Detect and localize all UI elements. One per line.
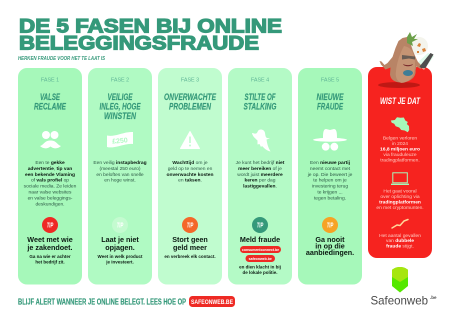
text block [379, 233, 421, 250]
text block: tradingplatformen [379, 200, 421, 206]
text block: via frauduleuze [383, 152, 417, 158]
logo: safeonweb [370, 267, 437, 308]
text block: een bekende Vlaming [25, 172, 75, 178]
text block: te helpen om je [313, 178, 347, 184]
text block: of vals profiel op [31, 178, 69, 184]
tip text: Stort geen [172, 235, 208, 244]
heading: veilige inleg: INLEG, HOGE [100, 102, 141, 112]
tip text: de lokale politie. [242, 270, 278, 275]
logo: safeonweb: Safeonweb [370, 294, 428, 308]
icon: tip badge [182, 217, 198, 233]
panel: fase 1: FASE 1 [41, 78, 59, 84]
text block: tegen betaling. [314, 196, 346, 202]
heading: veilige inleg: WINSTEN [104, 111, 136, 121]
text block: wordt juist meerdere [237, 172, 283, 178]
heading: valse reclame: RECLAME [34, 102, 67, 112]
tip text [164, 235, 216, 259]
heading: valse reclame: VALSE [40, 92, 61, 102]
text block: en beloftes van snelle [96, 172, 144, 178]
icon: tip badge: TIP [257, 222, 263, 230]
text block: geld op te nemen en [168, 166, 213, 172]
link pill [189, 296, 235, 307]
text block [93, 160, 147, 184]
tip text: consumentconnect.be [242, 248, 279, 252]
heading: nieuwe fraude: NIEUWE [316, 92, 344, 102]
text block: over oplichting via [380, 194, 420, 200]
text block: te krijgen ... [317, 190, 343, 196]
text block: investering terug [312, 184, 348, 190]
icon: laptop [391, 173, 409, 184]
text block: Je kunt het bedrijf niet [236, 160, 285, 166]
heading: onverwachte problemen: ONVERWACHTE [164, 92, 217, 102]
heading: nieuwe fraude [316, 92, 344, 112]
text block: Een nieuwe partij [310, 160, 351, 166]
panel: fase 3: FASE 3 [181, 78, 199, 84]
icon: rising line [392, 220, 408, 228]
icon: tip badge: TIP [327, 222, 333, 230]
panel: fase 2 [88, 68, 152, 284]
text block [166, 160, 214, 184]
text block [24, 160, 77, 208]
icon: hat and glasses [313, 129, 347, 151]
text block [307, 160, 353, 202]
text block: in 2024 [392, 141, 408, 147]
title: DE 5 FASEN BIJ ONLINE [19, 16, 282, 38]
icon: mustache and glasses [40, 131, 61, 148]
icon: map of Belgium [391, 117, 409, 132]
tip text: geld meer [173, 243, 207, 252]
text block: (meestal 250 euro) [99, 166, 141, 172]
text block: lastiggevallen. [243, 184, 277, 190]
heading: nieuwe fraude: FRAUDE [317, 102, 344, 112]
heading: veilige inleg: VEILIGE [108, 92, 133, 102]
tip text [239, 235, 281, 275]
text block: van dubbele [386, 238, 414, 244]
icon: tip badge: TIP [117, 222, 123, 230]
text block: Een te gekke [35, 160, 65, 166]
tip text: Ga na wie er achter [29, 254, 71, 259]
text block: Een veilig instapbedrag [93, 160, 147, 166]
text block: en met cryptomunten. [376, 205, 424, 211]
icon: shield [392, 267, 408, 292]
text block: naar valse websites [29, 190, 72, 196]
icon: tip badge: TIP [187, 222, 193, 230]
tip text: Ga nooit [315, 235, 345, 244]
heading: onverwachte problemen [164, 92, 217, 112]
icon: tip badge [322, 217, 338, 233]
text block: 16,8 miljoen euro [380, 146, 420, 152]
text block [380, 136, 420, 164]
text block: advertentie, tip van [28, 166, 72, 172]
subtitle: HERKEN FRAUDE VOOR HET TE LAAT IS [18, 56, 105, 62]
icon: warning triangle [180, 132, 200, 148]
text block: en valse beleggings- [28, 196, 73, 202]
tip text: en verbreek elk contact. [164, 254, 216, 259]
text block: Wachttijd om je [172, 160, 208, 166]
text block: keren per dag [244, 178, 276, 184]
tip text [306, 235, 354, 257]
panel: fase 1 [18, 68, 82, 284]
panel: fase 5 [298, 68, 362, 284]
tip text: opjagen. [105, 243, 135, 252]
tip text: het bedrijf zit. [35, 260, 65, 264]
tip text: Weet in welk product [98, 254, 143, 259]
title: BELEGGINGSFRAUDE [19, 34, 259, 54]
logo: safeonweb: .be [430, 295, 437, 300]
icon: ghost [252, 129, 270, 152]
tip text: je zakendoet. [26, 243, 73, 252]
heading: stilte of stalking: STILTE OF [244, 92, 276, 102]
text block: Het aantal gevallen [379, 233, 421, 239]
tip text: aanbiedingen. [306, 248, 354, 257]
text block: en hoge winst. [104, 178, 136, 184]
panel: fase 4: FASE 4 [251, 78, 269, 84]
icon: tip badge [252, 217, 268, 233]
text block: Het gaat vooral [383, 188, 417, 194]
text block: deskundigen. [35, 202, 65, 208]
text block: neemt contact met [310, 166, 351, 172]
tip text [26, 235, 73, 264]
tip text: in op die [315, 242, 345, 250]
text block: meer bereiken of je [238, 166, 282, 172]
heading: stilte of stalking [244, 92, 276, 112]
title [19, 16, 282, 54]
icon: banknote flag [107, 132, 133, 147]
heading: veilige inleg [100, 92, 141, 121]
panel: fase 3 [158, 68, 222, 284]
text block: Belgen verloren [383, 136, 417, 142]
tip text [98, 235, 143, 264]
tip text: je investeert. [105, 260, 134, 264]
text block [236, 160, 285, 190]
link pill: SAFEONWEB.BE [191, 299, 234, 306]
tip text: en dien klacht in bij [239, 264, 281, 270]
panel: fase 5: FASE 5 [321, 78, 339, 84]
tip text: safeonweb.be [249, 257, 272, 261]
panel: fase 4 [228, 68, 292, 284]
panel: fase 2: FASE 2 [111, 78, 129, 84]
icon: mascot character [380, 32, 434, 83]
heading: onverwachte problemen: PROBLEMEN [169, 102, 211, 112]
text block: sociale media. Ze leiden [24, 184, 77, 190]
heading: WIST JE DAT [380, 96, 421, 106]
text block: en taksen. [178, 178, 202, 184]
tip text: Laat je niet [101, 235, 139, 244]
heading: stilte of stalking: STALKING [244, 102, 276, 112]
icon: tip badge: TIP [47, 222, 53, 230]
panel: wist je dat [368, 67, 432, 258]
icon: tip badge [42, 217, 58, 233]
text block [376, 188, 424, 211]
footer call to action: BLIJF ALERT WANNEER JE ONLINE BELEGT. LEES HOE OP [18, 298, 186, 306]
text block: onverwachte kosten [166, 172, 214, 178]
text block: tradingplatformen. [380, 158, 420, 164]
tip text: Weet met wie [27, 235, 73, 244]
icon: banknote flag: £250 [112, 137, 128, 146]
heading: valse reclame [34, 92, 67, 112]
icon: tip badge [112, 217, 128, 233]
text block: je op. Die beweert je [307, 172, 353, 178]
text block: fraude stijgt. [386, 244, 414, 250]
tip text: Meld fraude [240, 235, 280, 244]
